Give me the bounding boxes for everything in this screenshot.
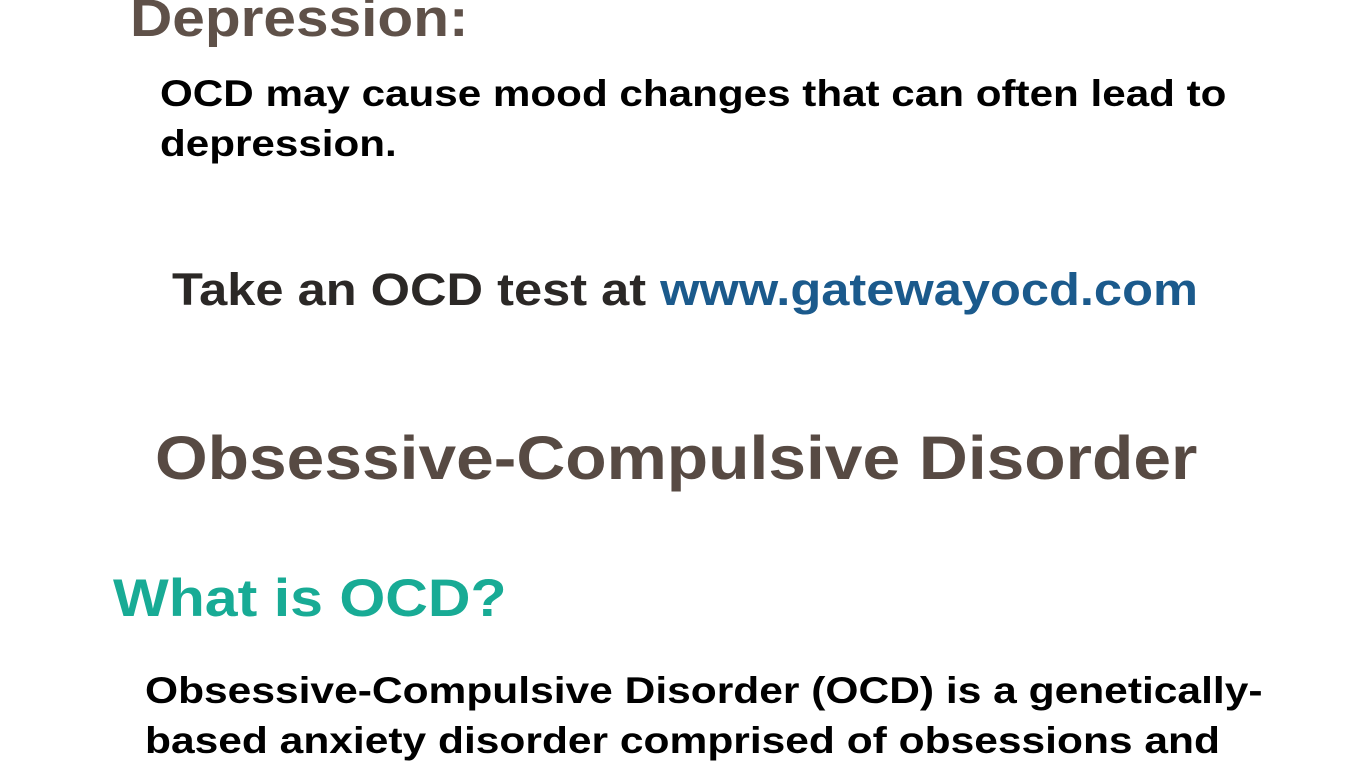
text block: depression description	[160, 73, 1226, 164]
text block: depression description: OCD may cause mood changes that can often lead to	[160, 73, 1226, 114]
text block: OCD definition	[145, 670, 1263, 761]
text block: OCD definition: Obsessive-Compulsive Disorder (OCD) is a genetically-	[145, 670, 1263, 711]
text block: OCD definition: based anxiety disorder comprised of obsessions and	[145, 720, 1220, 761]
callout: take a test: Take an OCD test at www.gatewayocd.com	[172, 264, 1198, 315]
heading: What is OCD: What is OCD?	[113, 569, 507, 628]
title: Obsessive-Compulsive Disorder	[155, 424, 1197, 492]
text block: depression description: depression.	[160, 123, 397, 164]
